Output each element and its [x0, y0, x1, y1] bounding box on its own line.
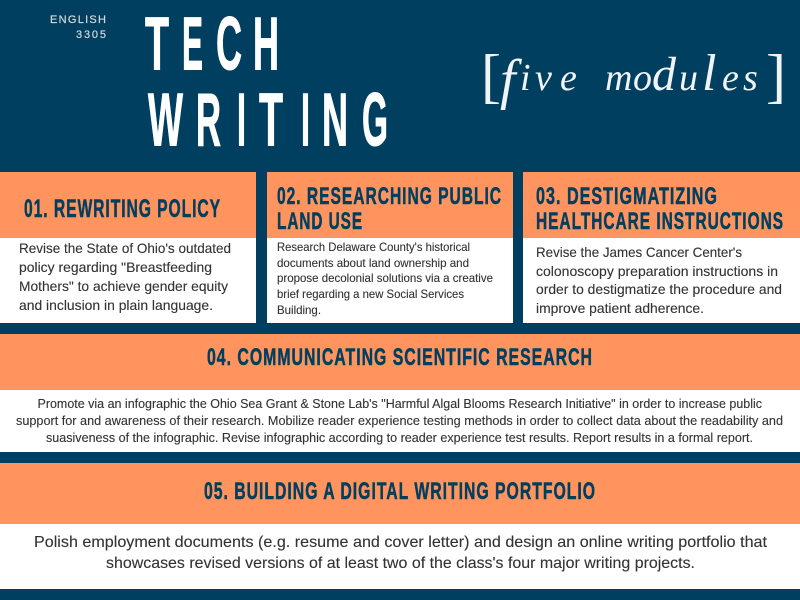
- subtitle: five modules: l: [702, 45, 716, 102]
- heading: module 02: LAND USE: [277, 208, 363, 235]
- heading: module 02: 02. RESEARCHING PUBLIC: [277, 183, 502, 210]
- text: module 01 description: policy regarding "Breastfeeding: [19, 259, 212, 275]
- panel: module 04: [0, 334, 800, 452]
- text: G: [362, 78, 388, 162]
- text: module 02 description: [277, 240, 493, 317]
- subtitle: five modules: s: [743, 57, 758, 99]
- title: E: [182, 2, 203, 86]
- text: module 05 description: showcases revised versions of at least two of the class's four major writing projects.: [106, 555, 695, 572]
- heading: module 05: 05. BUILDING A DIGITAL WRITING PORTFOLIO: [204, 478, 596, 505]
- subtitle: five modules: [: [481, 43, 501, 109]
- heading: module 03: [536, 183, 784, 235]
- text: module 04 description: support for and awareness of their research. Mobilize reader experience testing methods in order to collect data about the readability and: [16, 414, 783, 428]
- text: module 03 description: Revise the James Cancer Center's: [536, 244, 742, 260]
- title: R: [196, 78, 221, 162]
- title: N: [322, 78, 348, 162]
- text: module 03 description: improve patient adherence.: [536, 300, 704, 316]
- panel: module 01: [0, 172, 256, 323]
- heading: module 04: 04. COMMUNICATING SCIENTIFIC RESEARCH: [207, 344, 593, 371]
- text: module 04 description: Promote via an infographic the Ohio Sea Grant & Stone Lab's "Harmful Algal Blooms Research Initiative" in order to increase public: [38, 397, 762, 411]
- text: module 02 description: Building.: [277, 303, 321, 317]
- subtitle: five modules: v: [535, 57, 552, 99]
- panel: module 05: [0, 463, 800, 589]
- subtitle: five modules: o: [633, 57, 652, 99]
- course label: 3305: [76, 29, 106, 41]
- title: I: [301, 78, 310, 162]
- title: C: [216, 2, 242, 86]
- text: module 02 description: propose decolonial solutions via a creative: [277, 271, 493, 285]
- text: module 03 description: [536, 244, 782, 316]
- text: module 01 description: [19, 240, 231, 313]
- subtitle: five modules: e: [560, 57, 577, 99]
- subtitle: five modules: d: [652, 48, 677, 101]
- text: module 02 description: documents about land ownership and: [277, 256, 469, 270]
- title: I: [237, 78, 246, 162]
- text: module 01 description: Revise the State of Ohio's outdated: [19, 240, 231, 256]
- subtitle: five modules: m: [605, 57, 632, 99]
- title: T: [145, 2, 169, 86]
- text: module 04 description: [16, 397, 783, 445]
- subtitle: five modules: i: [520, 57, 531, 99]
- text: module 01 description: and inclusion in plain language.: [19, 297, 213, 313]
- title: T: [259, 78, 283, 162]
- course label: ENGLISH: [50, 14, 106, 26]
- subtitle: five modules: e: [722, 57, 739, 99]
- heading: module 03: 03. DESTIGMATIZING: [536, 183, 718, 210]
- text: module 04 description: suasiveness of the infographic. Revise infographic according to reader experience test results. Report results in a formal report.: [46, 431, 753, 445]
- subtitle: five modules: ]: [766, 43, 786, 109]
- heading: module 02: [277, 183, 502, 235]
- text: module 05 description: [34, 534, 768, 572]
- text: module 02 description: brief regarding a new Social Services: [277, 287, 464, 301]
- title: W: [148, 78, 183, 162]
- text: module 03 description: order to destigmatize the procedure and: [536, 281, 782, 297]
- text: module 03 description: colonoscopy preparation instructions in: [536, 263, 778, 279]
- text: module 02 description: Research Delaware County's historical: [277, 240, 470, 254]
- subtitle: five modules: f: [500, 49, 523, 111]
- panel: module 03: [523, 172, 800, 323]
- subtitle: five modules: u: [679, 57, 698, 99]
- text: module 05 description: Polish employment documents (e.g. resume and cover letter) and design an online writing portfolio that: [34, 534, 768, 551]
- text: module 01 description: Mothers" to achieve gender equity: [19, 278, 228, 294]
- title: [145, 2, 388, 162]
- course label: [50, 14, 106, 41]
- title: H: [253, 2, 279, 86]
- panel: module 02: [267, 172, 513, 323]
- heading: module 01: 01. REWRITING POLICY: [24, 195, 221, 223]
